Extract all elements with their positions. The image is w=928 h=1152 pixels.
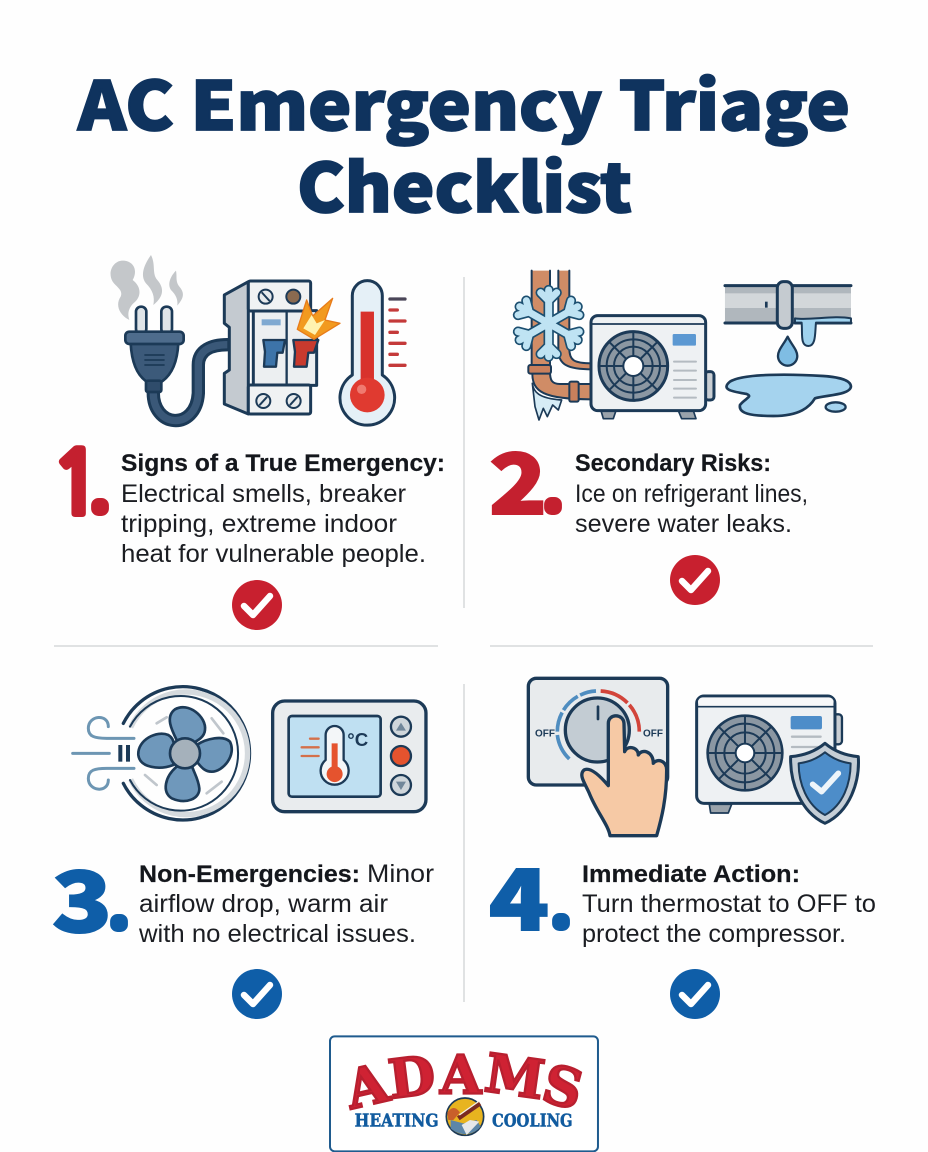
icon: electrical hazards xyxy=(111,255,405,425)
icon: blue check xyxy=(232,969,282,1019)
icon: hand pressing dial xyxy=(582,716,667,836)
text: immediate action: Turn thermostat to OFF to xyxy=(582,890,876,918)
icon: dial panel xyxy=(528,678,668,785)
logo wordmark: S xyxy=(536,1052,590,1123)
logo: Adams Heating & Cooling xyxy=(330,1036,598,1151)
logo badge xyxy=(446,1098,484,1135)
text: non-emergencies: airflow drop, warm air xyxy=(139,890,388,918)
logo wordmark: M xyxy=(481,1041,548,1112)
icon: leaking pipe xyxy=(725,282,851,416)
text: signs of a true emergency: Electrical smells, breaker xyxy=(121,480,406,508)
logo wordmark: D xyxy=(385,1043,439,1111)
icon: circuit breaker xyxy=(224,281,340,414)
number 4: . xyxy=(558,906,564,928)
number 4 xyxy=(489,834,564,955)
item 2: secondary risks xyxy=(489,418,808,605)
icon: outdoor AC unit xyxy=(591,316,714,419)
item 3: non-emergencies xyxy=(52,836,434,1019)
icon: spark xyxy=(297,298,340,339)
item 1: true emergency xyxy=(50,441,445,630)
icon: thermostat: °C xyxy=(347,729,368,750)
icon: snowflake xyxy=(518,290,579,357)
icon: thermostat xyxy=(273,701,426,812)
item 4: immediate action xyxy=(489,834,876,1019)
title xyxy=(77,53,850,232)
icon: plug xyxy=(125,307,227,421)
icon: dial panel: OFF xyxy=(535,728,555,739)
number 2: . xyxy=(550,490,556,512)
text: immediate action xyxy=(582,861,876,948)
title: AC Emergency Triage xyxy=(77,53,850,150)
number 1: . xyxy=(97,492,103,514)
icon: dial panel: OFF xyxy=(643,728,663,739)
icon: thermostat off and protected unit xyxy=(528,678,858,836)
text: non-emergencies: Minor xyxy=(367,860,434,888)
number 3: 3 xyxy=(52,836,112,957)
icon: AC unit xyxy=(697,696,858,823)
number 2: 2 xyxy=(489,418,547,539)
logo tagline: COOLING xyxy=(492,1111,573,1131)
icon: weak fan and thermostat xyxy=(73,687,426,820)
logo tagline: HEATING xyxy=(355,1111,439,1131)
text: secondary risks xyxy=(575,450,808,538)
text: signs of a true emergency: heat for vulnerable people. xyxy=(121,540,426,568)
text: non-emergencies: with no electrical issues. xyxy=(138,920,416,948)
text: signs of a true emergency: tripping, extreme indoor xyxy=(121,510,397,538)
number 3: . xyxy=(116,908,122,930)
logo wordmark: A xyxy=(439,1044,482,1107)
icon: smoke xyxy=(111,255,183,320)
icon: water puddle xyxy=(726,375,851,416)
text: secondary risks: severe water leaks. xyxy=(575,510,792,538)
text: immediate action: Immediate Action: xyxy=(582,861,800,888)
icon: copper pipes xyxy=(528,271,592,420)
icon: fan xyxy=(73,687,250,820)
title: Checklist xyxy=(297,135,632,232)
icon: shield xyxy=(791,743,858,823)
text: non-emergencies: Non-Emergencies: xyxy=(139,861,360,888)
text: secondary risks: Secondary Risks: xyxy=(575,450,771,477)
number 1: 1 xyxy=(50,441,103,528)
icon: frozen lines and water leak xyxy=(518,271,851,420)
icon: red check xyxy=(232,580,282,630)
text: non-emergencies xyxy=(138,860,434,948)
icon: thermometer xyxy=(340,281,405,425)
icon: red check xyxy=(670,555,720,605)
logo wordmark: A xyxy=(339,1051,395,1122)
text: signs of a true emergency xyxy=(121,450,445,568)
text: secondary risks: Ice on refrigerant lines, xyxy=(575,480,808,508)
logo wordmark xyxy=(339,1041,590,1123)
number 4: 4 xyxy=(489,834,549,955)
text: immediate action: protect the compressor. xyxy=(582,920,846,948)
icon: blue check xyxy=(670,969,720,1019)
text: signs of a true emergency: Signs of a True Emergency: xyxy=(121,450,445,477)
logo tagline xyxy=(355,1111,573,1131)
